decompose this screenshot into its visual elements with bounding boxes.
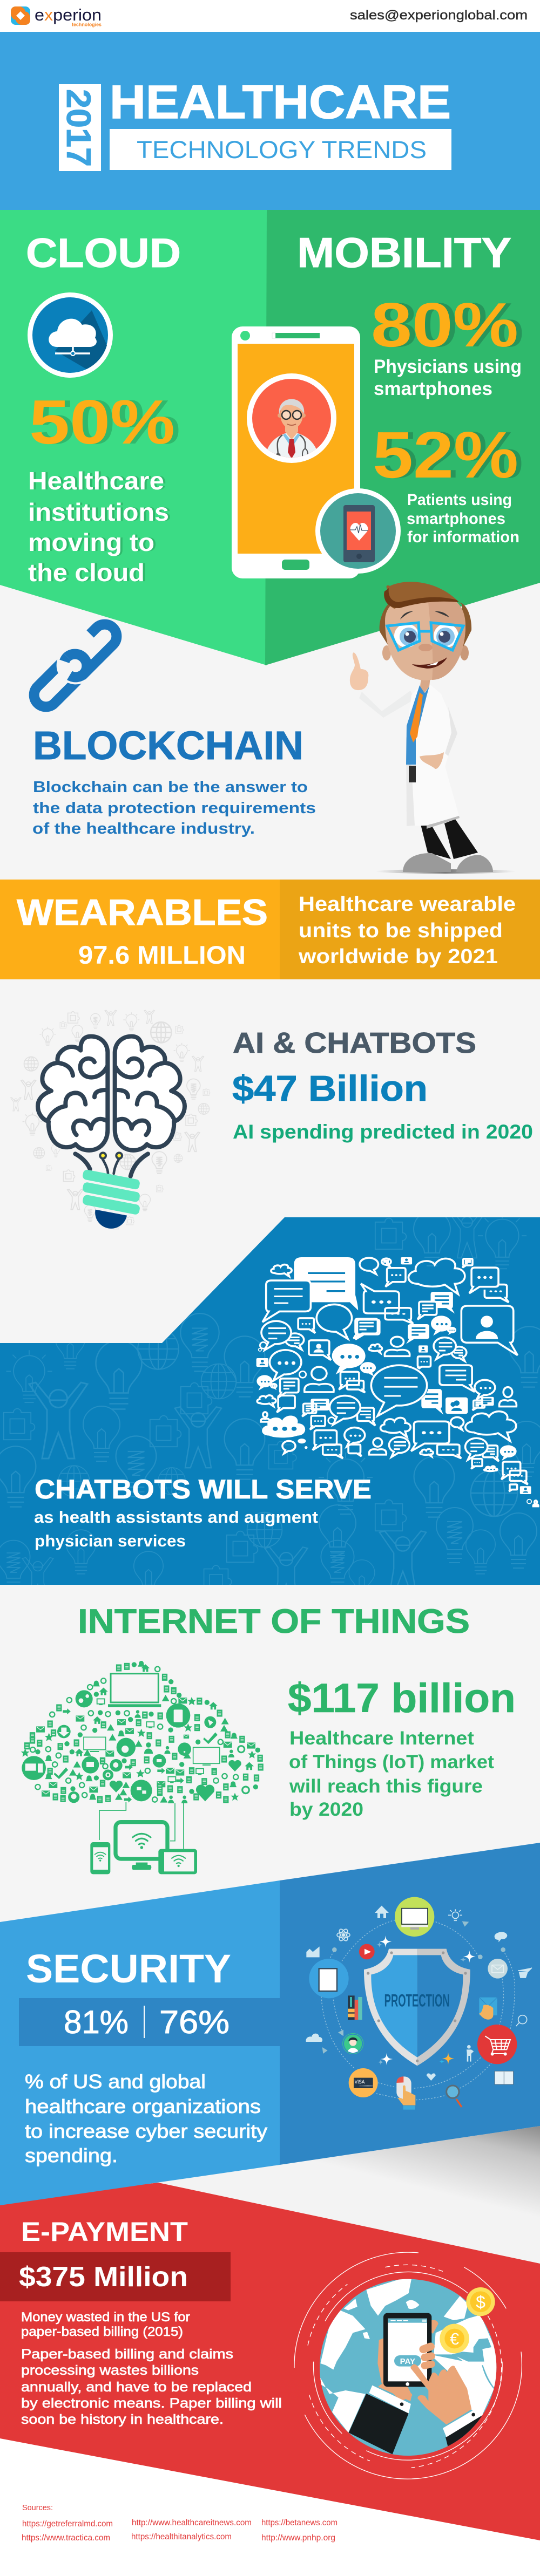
character: cartoon doctor <box>350 582 516 874</box>
sources: http://www.pnhp.org <box>261 2533 335 2543</box>
belt <box>409 766 416 782</box>
title panel <box>0 32 540 210</box>
stat bar: 81 and 76 percent: 81% <box>64 2004 129 2040</box>
text: security description: healthcare organizations <box>25 2095 261 2117</box>
text: paper-based billing: processing wastes billions <box>21 2363 199 2378</box>
text: blockchain description: the data protection requirements <box>33 800 316 817</box>
text: healthcare institutions: the cloud <box>30 558 147 587</box>
stat: 52 percent: 52% <box>373 418 518 492</box>
text: healthcare institutions: moving to <box>30 528 157 556</box>
raised arm <box>359 691 415 718</box>
sources heading: Sources: <box>22 2503 53 2512</box>
text: healthcare institutions: Healthcare <box>30 467 166 495</box>
text: patients using smartphones: Patients using <box>407 491 512 509</box>
heading: cloud: CLOUD <box>26 230 181 276</box>
speech bubble collage <box>256 1257 538 1507</box>
heading: wearables: WEARABLES <box>17 892 268 933</box>
heading: chatbots will serve: CHATBOTS WILL SERVE <box>35 1474 372 1504</box>
text: paper-based billing: Paper-based billing and claims <box>21 2347 233 2362</box>
icon: brain light bulb <box>11 1010 210 1229</box>
text: healthcare institutions: Healthcare <box>28 467 164 495</box>
sources: https://getreferralmd.com <box>22 2519 113 2529</box>
text: healthcare institutions: institutions <box>28 498 169 526</box>
header bar <box>0 0 540 32</box>
text: healthcare institutions: moving to <box>28 528 154 556</box>
text: physicians using smartphones <box>374 356 522 399</box>
panel: chatbots will serve <box>0 1211 540 1603</box>
sources: https://healthitanalytics.com <box>131 2532 232 2541</box>
text: money wasted: paper-based billing (2015) <box>21 2325 183 2339</box>
panel: mobility <box>265 210 540 665</box>
dollar coin: $ <box>476 2292 485 2312</box>
stat: 50 percent: 50% <box>29 387 175 457</box>
heading: security: SECURITY <box>26 1946 231 1991</box>
text: healthcare institutions: institutions <box>30 498 171 526</box>
hair <box>384 582 459 609</box>
hand on envelope <box>479 1998 497 2020</box>
year badge: 2017 <box>59 89 97 167</box>
icon: play button <box>359 1944 375 1959</box>
stat: 97.6 million: 97.6 MILLION <box>78 941 246 969</box>
text: money wasted: Money wasted in the US for <box>21 2310 190 2325</box>
glasses <box>387 623 463 650</box>
background icon pattern <box>0 1211 540 1603</box>
heading: internet of things: INTERNET OF THINGS <box>78 1603 470 1640</box>
text: iot market: Healthcare Internet <box>289 1728 474 1749</box>
text: security description: spending. <box>25 2144 118 2166</box>
stat: 47 billion: $47 Billion <box>232 1068 428 1109</box>
icon: cloud network <box>28 292 113 378</box>
icon: visa card <box>349 2068 378 2097</box>
stat: 50 percent: 50% <box>35 387 180 457</box>
shadow under security panel <box>158 2126 540 2320</box>
text: ai spending: AI spending predicted in 2020 <box>233 1121 533 1143</box>
shield <box>364 1949 470 2066</box>
text: iot market <box>289 1728 494 1820</box>
subtitle: technology trends: TECHNOLOGY TRENDS <box>137 136 427 163</box>
ears <box>382 645 391 660</box>
icon: chain link <box>29 619 122 712</box>
pointing hand <box>410 2364 471 2424</box>
panel: internet of things <box>21 1603 516 1874</box>
face <box>385 594 465 680</box>
icon: visa card: VISA <box>355 2080 365 2086</box>
neck <box>420 677 430 693</box>
sparkles <box>376 1936 476 2065</box>
payment phone: PAY <box>400 2357 415 2366</box>
text: security description <box>25 2070 267 2166</box>
device: monitor <box>116 1822 167 1870</box>
logo: experion technologies <box>11 5 102 28</box>
illustration: mobile payment globe <box>294 2252 522 2479</box>
lower hand <box>420 752 444 769</box>
eyes <box>394 624 419 648</box>
shield: PROTECTION <box>384 1991 450 2011</box>
device: tablet <box>158 1849 197 1874</box>
text: paper-based billing <box>21 2347 282 2427</box>
logo: experion technologies: technologies <box>72 22 102 28</box>
magnifier <box>447 2086 462 2107</box>
sources <box>22 2503 338 2543</box>
heading: e-payment: E-PAYMENT <box>21 2217 188 2247</box>
stat: 375 million <box>0 2252 231 2301</box>
heading: blockchain: BLOCKCHAIN <box>33 723 303 768</box>
text: blockchain description: Blockchain can be the answer to <box>33 779 308 796</box>
icon: tablet <box>309 1959 349 1998</box>
stat: 80 percent: 80% <box>371 290 518 360</box>
text: wearable units: units to be shipped <box>299 919 503 942</box>
heading: mobility: MOBILITY <box>297 229 511 276</box>
icon: avatar <box>343 2033 363 2054</box>
panel: e-payment <box>0 2183 540 2540</box>
side hair <box>380 603 392 646</box>
heading: ai and chatbots: AI & CHATBOTS <box>233 1027 476 1059</box>
panel: ai and chatbots <box>11 1010 533 1229</box>
text: security description: to increase cyber security <box>25 2120 267 2142</box>
icon: iot cloud and devices <box>21 1661 264 1874</box>
eyebrows <box>400 611 449 619</box>
stat: 117 billion: $117 billion <box>288 1675 516 1721</box>
lab coat <box>406 685 459 826</box>
nose and mouth <box>418 644 433 651</box>
icon: monitor <box>395 1897 434 1937</box>
stat bar: 81 and 76 percent: 76% <box>159 2004 230 2040</box>
device: phone <box>90 1842 110 1874</box>
text: wearable units: Healthcare wearable <box>299 893 516 916</box>
text: blockchain description: of the healthcare industry. <box>32 820 255 837</box>
text: chatbots description <box>34 1508 318 1550</box>
shoes <box>403 853 451 872</box>
icon: envelope <box>488 1959 508 1979</box>
stat bar: 81 and 76 percent <box>19 1998 280 2046</box>
text: patients using smartphones: for information <box>407 528 519 546</box>
panel: security <box>0 1843 540 2205</box>
text: healthcare institutions <box>28 467 171 587</box>
trousers <box>411 777 451 859</box>
text: iot market: by 2020 <box>289 1799 363 1820</box>
text: paper-based billing: annually, and have to be replaced <box>21 2380 252 2395</box>
payment phone <box>383 2313 431 2387</box>
dollar coin <box>466 2287 495 2316</box>
text: money wasted <box>21 2310 190 2339</box>
logo: experion technologies: experion <box>35 5 102 24</box>
text: chatbots description: physician services <box>35 1531 186 1550</box>
icon: doctor avatar <box>247 373 336 464</box>
stat: 52 percent: 52% <box>377 418 523 492</box>
tie <box>410 692 423 742</box>
title: healthcare: HEALTHCARE <box>110 76 451 128</box>
euro coin: € <box>450 2330 459 2348</box>
text: paper-based billing: soon be history in healthcare. <box>21 2412 224 2427</box>
sources: http://www.healthcareitnews.com <box>132 2518 252 2527</box>
footer white background <box>0 2320 540 2576</box>
mouse and hand <box>396 2076 415 2110</box>
panel: cloud <box>0 210 267 665</box>
panel: blockchain <box>29 619 316 837</box>
euro coin <box>440 2324 469 2353</box>
text: physicians using smartphones: smartphones <box>374 378 492 399</box>
text: iot market: will reach this figure <box>289 1776 483 1797</box>
text: patients using smartphones <box>407 491 519 546</box>
text: security description: % of US and global <box>25 2070 206 2093</box>
sources: https://betanews.com <box>261 2518 338 2527</box>
text: paper-based billing: by electronic means. Paper billing will <box>21 2396 282 2411</box>
shirt <box>406 685 429 765</box>
text: wearable units: worldwide by 2021 <box>298 945 498 968</box>
text: blockchain description <box>32 779 316 837</box>
stat: 80 percent: 80% <box>376 290 524 360</box>
books <box>348 1995 362 2020</box>
panel: wearables <box>0 880 540 979</box>
icon: phone heartbeat <box>315 488 401 574</box>
text: wearable units <box>298 893 516 968</box>
contact email: sales@experionglobal.com <box>350 8 528 23</box>
text: chatbots description: as health assistants and augment <box>34 1508 318 1526</box>
subtitle: technology trends <box>110 129 451 170</box>
sources: https://www.tractica.com <box>22 2533 110 2543</box>
text: healthcare institutions: the cloud <box>28 558 145 587</box>
illustration: protection shield <box>306 1897 532 2110</box>
stat: 375 million: $375 Million <box>19 2261 188 2293</box>
text: physicians using smartphones: Physicians using <box>374 356 522 377</box>
small icons <box>306 1906 532 2084</box>
icon: shopping cart <box>477 2025 517 2064</box>
text: patients using smartphones: smartphones <box>407 510 505 528</box>
thumbs up hand <box>350 652 368 690</box>
smartphone illustration <box>232 326 401 578</box>
text: iot market: of Things (IoT) market <box>289 1752 494 1773</box>
